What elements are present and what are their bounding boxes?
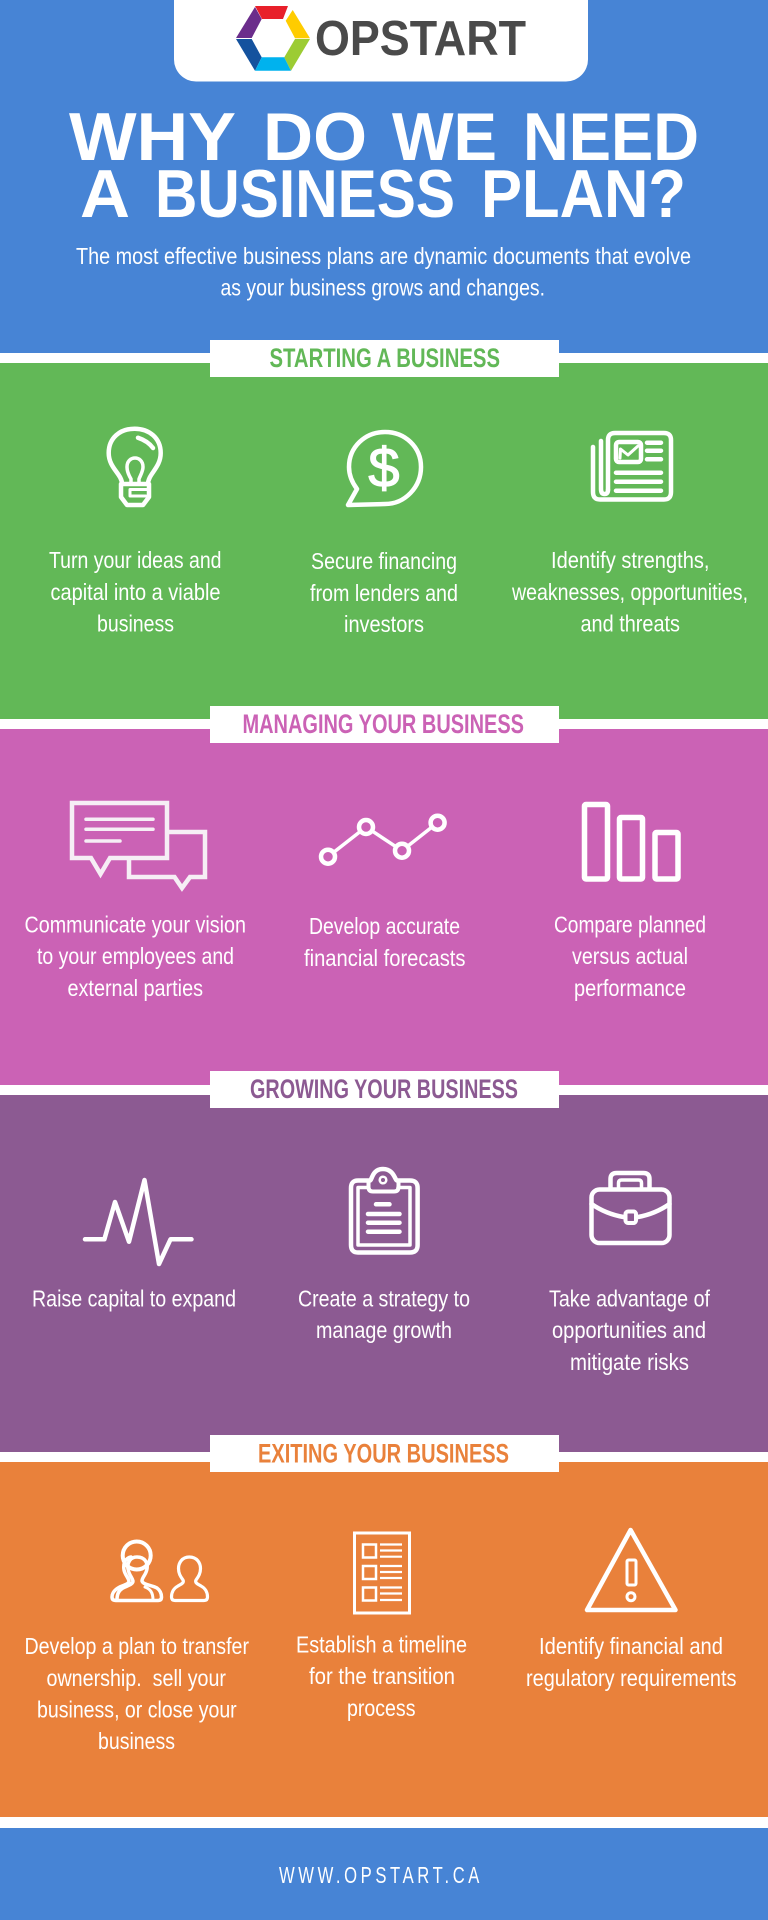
text: transfer ownership: Develop a plan to transfer (24, 1633, 249, 1659)
title: DO (263, 99, 367, 175)
text: secure financing: investors (344, 611, 424, 637)
text: financial forecasts (304, 913, 466, 971)
text: opportunities and risks: opportunities and (552, 1317, 706, 1343)
text: communicate vision: Communicate your vision (24, 912, 246, 938)
text: compare performance: Compare planned (554, 912, 706, 938)
text: timeline: for the transition (309, 1663, 455, 1689)
icon: dollar speech bubble (348, 432, 421, 505)
text: swot (511, 547, 748, 637)
panel: managing your business (0, 706, 768, 1085)
title: WHY (69, 99, 236, 175)
icon: briefcase (592, 1173, 670, 1243)
text: opportunities and risks: mitigate risks (570, 1349, 689, 1375)
text: compare performance: versus actual (572, 943, 688, 969)
text: requirements: regulatory requirements (526, 1665, 736, 1691)
title: WE (392, 99, 497, 175)
text: timeline (296, 1632, 467, 1721)
heading: managing your business: MANAGING YOUR BUSINESS (242, 709, 524, 739)
text: strategy (298, 1286, 470, 1343)
footer url: WWW.OPSTART.CA (279, 1862, 483, 1888)
icon: dollar speech bubble: $ (368, 436, 400, 499)
icon: bar chart (584, 804, 678, 879)
title: A (80, 156, 130, 232)
text: compare performance (554, 912, 706, 1001)
icon: warning triangle (587, 1530, 676, 1610)
text: transfer ownership: business, or close your (37, 1697, 237, 1723)
text: financial forecasts: financial forecasts (304, 945, 466, 971)
panel: header (0, 0, 768, 353)
icon: checklist document (354, 1533, 410, 1613)
heading: exiting your business: EXITING YOUR BUSINESS (258, 1438, 509, 1468)
text: secure financing: Secure financing (311, 548, 457, 574)
text: requirements (526, 1633, 736, 1691)
text: secure financing: from lenders and (310, 580, 458, 606)
text: opportunities and risks: Take advantage of (549, 1286, 711, 1312)
heading: growing your business: GROWING YOUR BUSINESS (250, 1074, 518, 1104)
heading: starting a business (210, 340, 559, 377)
text: swot: Identify strengths, (551, 547, 710, 573)
text: turn ideas into business (49, 547, 222, 637)
text: communicate vision: external parties (68, 975, 203, 1001)
text: compare performance: performance (574, 975, 686, 1001)
text: transfer ownership: business (98, 1728, 175, 1754)
heading: growing your business (210, 1071, 559, 1108)
title (69, 99, 699, 232)
icon: line chart (321, 816, 445, 864)
text: communicate vision: to your employees and (37, 943, 234, 969)
icon: speech bubbles (72, 803, 205, 888)
text: transfer ownership (24, 1633, 249, 1754)
icon: pulse line (85, 1180, 192, 1264)
icon: clipboard (351, 1169, 418, 1252)
subtitle (76, 243, 691, 300)
title: NEED (523, 99, 699, 175)
icon: people (112, 1542, 208, 1600)
text: turn ideas into business: business (97, 611, 174, 637)
icon: lightbulb (109, 429, 161, 505)
text: raise capital: Raise capital to expand (32, 1286, 236, 1312)
title: BUSINESS (155, 156, 455, 232)
text: swot: and threats (580, 611, 680, 637)
text: strategy: manage growth (316, 1317, 452, 1343)
panel: exiting your business (0, 1435, 768, 1817)
panel: starting a business (0, 340, 768, 719)
text: turn ideas into business: capital into a viable (50, 579, 220, 605)
title: PLAN? (481, 156, 686, 232)
icon: hexagon logo (236, 6, 310, 71)
panel: footer (0, 1817, 768, 1920)
heading: exiting your business (210, 1435, 559, 1472)
logo card (174, 0, 588, 82)
text: requirements: Identify financial and (539, 1633, 723, 1659)
subtitle: as your business grows and changes. (220, 274, 545, 300)
heading: managing your business (210, 706, 559, 743)
text: opportunities and risks (549, 1286, 711, 1375)
text: turn ideas into business: Turn your ideas and (49, 547, 222, 573)
icon: newspaper (593, 433, 671, 500)
text: timeline: Establish a timeline (296, 1632, 467, 1658)
text: financial forecasts: Develop accurate (309, 913, 460, 939)
text: strategy: Create a strategy to (298, 1286, 470, 1312)
text: transfer ownership: ownership. sell your (46, 1665, 226, 1691)
text: communicate vision (24, 912, 246, 1001)
logo wordmark: OPSTART (315, 12, 526, 66)
panel: growing your business (0, 1071, 768, 1452)
text: secure financing (310, 548, 458, 637)
text: timeline: process (347, 1695, 416, 1721)
heading: starting a business: STARTING A BUSINESS (270, 343, 500, 373)
